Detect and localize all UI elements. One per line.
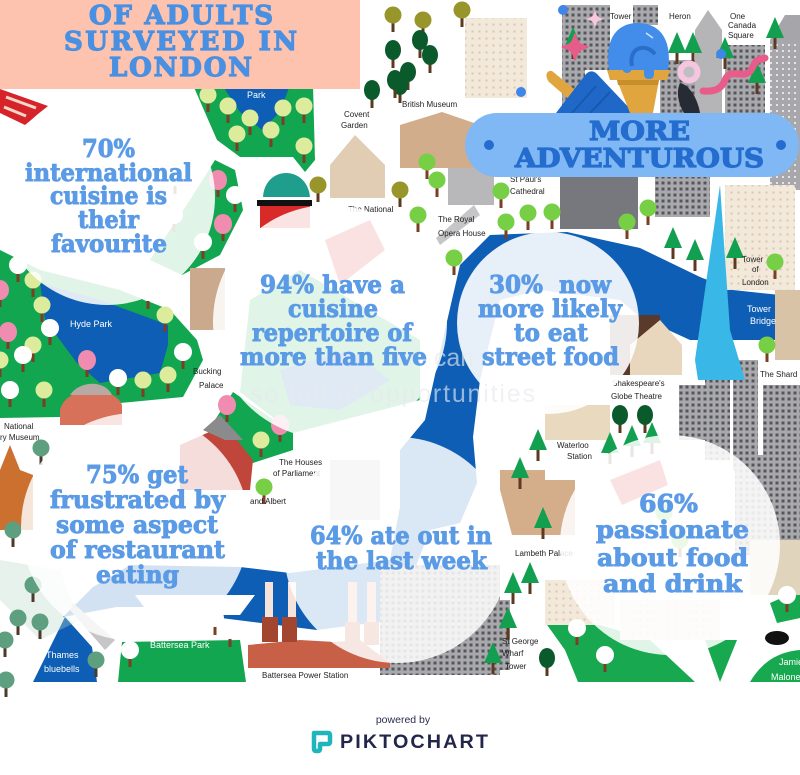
stat: 64% ate out: 64% ate out in: [310, 521, 492, 550]
map: labels: Malone: [771, 672, 800, 682]
stat: 70% international cuisine: 70%: [82, 134, 135, 163]
map: labels: The National: [348, 205, 394, 214]
stat: 64% ate out: [310, 521, 492, 575]
icon: pink sparkle: [562, 34, 588, 60]
circle: 70% backdrop: [0, 89, 215, 305]
icon: ice cream cone: [607, 23, 670, 113]
map: Natural History Museum: [0, 445, 33, 530]
title text: OF ADULTS: [89, 1, 273, 31]
stat: 70% international cuisine: cuisine is: [50, 181, 167, 210]
map: labels: Square: [728, 31, 754, 40]
map: River Thames: [63, 232, 800, 630]
map: labels: Covent: [344, 110, 370, 119]
icon: food illustration: [516, 5, 765, 113]
map: labels: Hyde Park: [70, 319, 113, 329]
map: Battersea Power Station: [248, 582, 390, 668]
map: labels: Heron: [669, 12, 691, 21]
map: labels: of Parliament: [273, 469, 321, 478]
map: The Shard: [695, 185, 745, 380]
map: grey road: [70, 205, 480, 650]
map: Royal Albert Hall: [60, 384, 122, 425]
footer: piktochart credit: powered by: [376, 714, 431, 726]
piktochart wordmark: PIKTOCHART: [340, 732, 490, 753]
icon: blue dots: [516, 5, 726, 97]
icon: piktochart logo: [314, 733, 330, 751]
title text: LONDON: [109, 53, 252, 83]
map: labels: Thames: [46, 650, 79, 660]
map: black taxi: [765, 631, 789, 645]
map: labels: Waterloo: [557, 441, 589, 450]
banner heading: ADVENTUROUS: [514, 144, 764, 174]
map: labels: and Albert: [250, 497, 287, 506]
map: lower right tower blocks: [380, 350, 800, 675]
map: Buckingham Palace: [190, 268, 225, 330]
map: labels: Cathedral: [510, 187, 545, 196]
map: Lambeth Palace: [500, 470, 575, 535]
map: labels: British Museum: [402, 100, 457, 109]
map: British Museum: [400, 112, 480, 168]
circle: 66% backdrop: [560, 435, 780, 655]
map: labels: Tower: [505, 662, 527, 671]
stat: 66% passionate: [596, 489, 749, 598]
map: labels: London: [742, 278, 769, 287]
map: labels: St George: [502, 637, 539, 646]
map: red bus top left: [0, 89, 48, 125]
map: St Paul's Cathedral: [560, 177, 638, 229]
banner heading: MORE: [589, 117, 690, 147]
map: cream buildings: [465, 18, 800, 640]
map: red bus, lower right: [610, 460, 668, 505]
stat: 75% frustrated: 75% get: [86, 460, 188, 489]
map: labels: of: [752, 265, 759, 274]
stat: 75% frustrated: of restaurant: [50, 535, 225, 564]
stat: 66% passionate: about food: [597, 543, 748, 572]
map: labels: Tower: [742, 255, 764, 264]
stat: 30% street food: [478, 270, 623, 371]
stat: 30% street food: more likely: [478, 294, 623, 323]
map: cruise ship: [135, 595, 255, 615]
map: Covent Garden market: [330, 135, 385, 198]
map: labels: Shakespeare's: [612, 379, 665, 388]
map: labels: Opera House: [438, 229, 486, 238]
map: labels: Canada: [728, 21, 757, 30]
map: Nelson dome: [257, 173, 312, 228]
stat: 70% international cuisine: international: [25, 158, 192, 187]
map: labels: Palace: [199, 381, 224, 390]
map: labels: One: [730, 12, 746, 21]
map: Globe Theatre: [630, 320, 682, 375]
map: labels: St Paul's: [510, 175, 541, 184]
map: labels: bluebells: [44, 664, 80, 674]
circle: 75% backdrop: [21, 413, 249, 641]
stat: 66% passionate: passionate: [596, 515, 749, 544]
stat: 75% frustrated: [50, 460, 226, 589]
circle: 30% backdrop: [457, 232, 639, 414]
map: labels: Wharf: [502, 649, 524, 658]
stat: 30% street food: to eat: [514, 318, 588, 347]
stat: 70% international cuisine: their: [78, 205, 139, 234]
map: labels: Bridge: [750, 316, 776, 326]
map: labels: The Houses: [279, 458, 322, 467]
icon: doughnut: [680, 64, 698, 80]
stat: 30% street food: 30% now: [489, 270, 612, 299]
stat: 94% cuisine repertoire: cuisine: [288, 294, 378, 323]
stat: 75% frustrated: some aspect: [56, 510, 218, 539]
stat: 30% street food: street food: [482, 342, 619, 371]
map: labels: The Shard: [760, 370, 797, 379]
map: labels: Station: [567, 452, 592, 461]
map: labels: The Royal: [438, 215, 475, 224]
footer: piktochart credit: [314, 714, 490, 753]
stat: 70% international cuisine: [25, 134, 192, 258]
stat: 94% cuisine repertoire: more than five: [240, 342, 427, 371]
map: labels: Lambeth Palace: [515, 549, 573, 558]
map: labels: Bucking: [193, 367, 221, 376]
icon: popsicle: [546, 71, 634, 113]
circle: 94% backdrop: [213, 205, 447, 439]
map: labels: ry Museum: [0, 433, 40, 442]
icon: light pink sparkle: [585, 9, 605, 29]
map: labels: Battersea Power Station: [262, 671, 348, 680]
title panel: [0, 0, 360, 89]
stat: 75% frustrated: frustrated by: [50, 485, 226, 514]
stat: 94% cuisine repertoire: 94% have a: [260, 270, 405, 299]
map: labels: National: [4, 422, 34, 431]
stat: 94% cuisine repertoire: [240, 270, 427, 371]
map: labels: Garden: [341, 121, 368, 130]
map: City of London skyscrapers: [448, 5, 800, 217]
icon: fork: [678, 83, 700, 113]
map: Houses of Parliament: [330, 460, 380, 520]
stat: 66% passionate: 66%: [639, 489, 698, 518]
map: labels: Park: [247, 90, 266, 100]
stat: 75% frustrated: eating: [96, 560, 179, 589]
map: labels: Tower: [610, 12, 632, 21]
faint background caption: so full of opportunities: [250, 380, 535, 408]
faint background caption: we can: [394, 344, 474, 372]
stat: 94% cuisine repertoire: repertoire of: [252, 318, 414, 347]
map: parks: [0, 85, 800, 682]
icon: pink squiggle: [703, 58, 765, 91]
banner heading: [514, 117, 764, 174]
stat: 64% ate out: the last week: [316, 546, 488, 575]
stat: 66% passionate: and drink: [603, 569, 743, 598]
map: red bus, Hyde Park end: [325, 220, 385, 285]
title text: SURVEYED IN: [64, 27, 297, 57]
map: labels: Globe Theatre: [611, 392, 663, 401]
title text: [64, 1, 297, 83]
faint background caption: [250, 344, 535, 408]
map: labels: Tower: [747, 304, 771, 314]
stat: 70% international cuisine: favourite: [51, 229, 167, 258]
map: red brick building: [180, 415, 253, 490]
circle: 64% backdrop: [284, 437, 510, 663]
banner: more adventurous: [465, 113, 799, 177]
map: labels: Battersea Park: [150, 640, 210, 650]
map: Waterloo Station: [545, 405, 610, 440]
